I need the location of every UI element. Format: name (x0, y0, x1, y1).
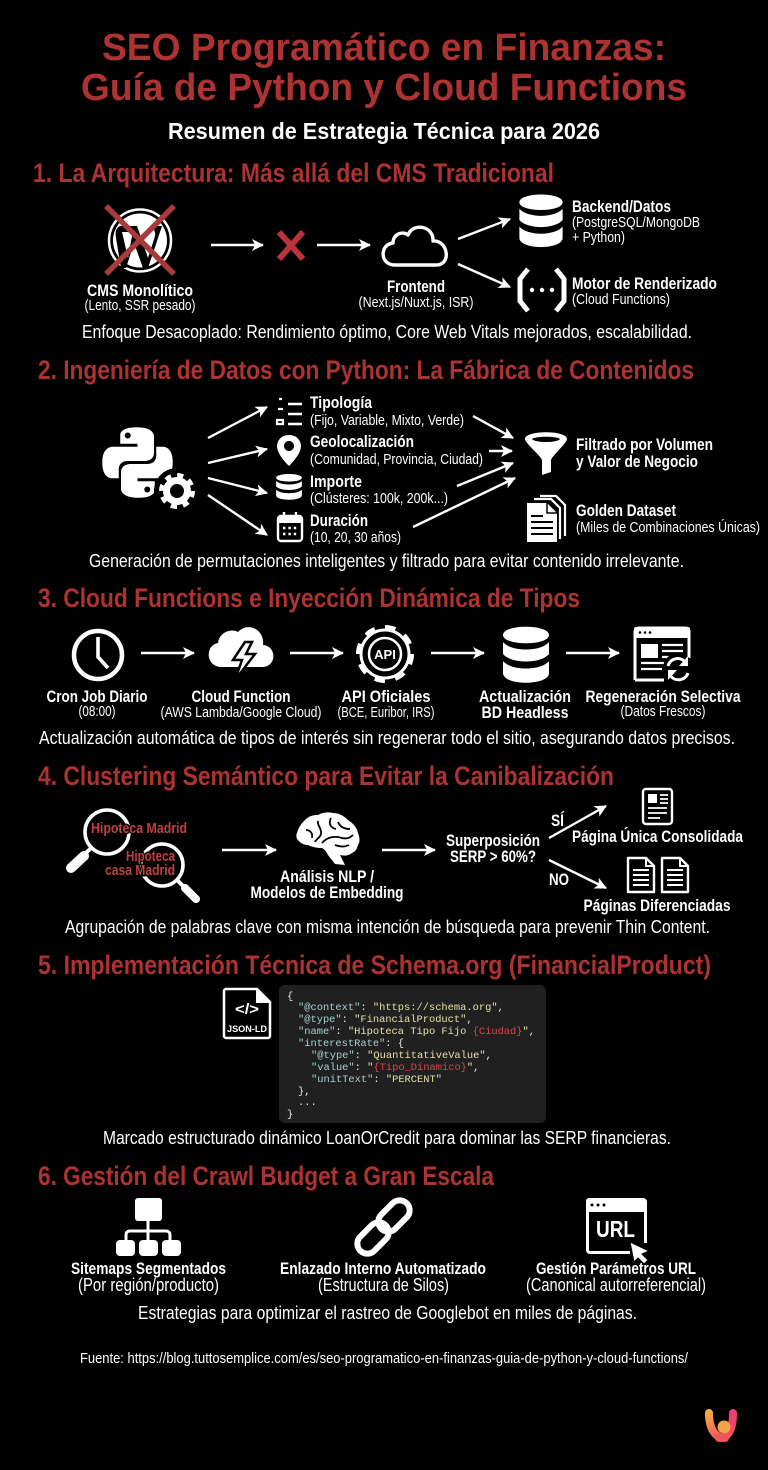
Importe label (310, 473, 448, 507)
arrows to funnel (413, 416, 515, 527)
panel: section 3 cloud functions (38, 583, 741, 748)
icon: typology list (277, 399, 302, 424)
Cron label: (08:00) (78, 703, 116, 720)
logo (709, 1413, 733, 1438)
Regeneración label: Regeneración Selectiva (586, 688, 741, 706)
arrow (431, 652, 484, 654)
icon: JSON-LD file: </> (235, 1001, 259, 1018)
Golden label (576, 502, 760, 536)
code panel: "@type": "FinancialProduct", (298, 1014, 473, 1026)
code panel: }, (298, 1086, 310, 1098)
Motor label (572, 275, 717, 308)
Importe label: (Clústeres: 100k, 200k...) (310, 490, 448, 507)
icon: URL browser (586, 1198, 649, 1264)
branch no: NO (549, 871, 569, 889)
Filtrado label: y Valor de Negocio (576, 453, 698, 471)
code panel: "@context": "https://schema.org", (298, 1002, 504, 1014)
heading 3: 3. Cloud Functions e Inyección Dinámica de Tipos (38, 583, 580, 613)
Frontend label: Frontend (387, 278, 445, 296)
Sitemaps label (71, 1260, 226, 1295)
branch yes: SÍ (551, 811, 564, 830)
arrows from python (208, 407, 267, 535)
question (446, 832, 540, 866)
Frontend label (358, 278, 474, 311)
icon: coins (276, 474, 302, 500)
code panel: "value": "{Tipo_Dinamico}", (311, 1062, 479, 1074)
Backend label (572, 198, 700, 246)
Importe label: Importe (310, 473, 362, 491)
icon: database (503, 627, 549, 683)
Cloud Function label: (AWS Lambda/Google Cloud) (160, 704, 322, 721)
Golden label: Golden Dataset (576, 502, 676, 520)
icon: magnifiers with keywords: Hipoteca Madrid (91, 820, 187, 837)
title (81, 27, 687, 109)
heading 1: 1. La Arquitectura: Más allá del CMS Tradicional (33, 158, 554, 188)
code panel: ... (298, 1097, 317, 1109)
Backend label: (PostgreSQL/MongoDB (572, 214, 700, 231)
NLP label: Modelos de Embedding (250, 884, 404, 902)
icon: python with gear (102, 427, 200, 514)
branch no (549, 860, 606, 889)
Tipología label: Tipología (310, 394, 373, 412)
panel: section 2 data engineering (38, 355, 760, 571)
icon: differentiated pages (628, 858, 688, 892)
icon: JSON-LD file (224, 989, 270, 1038)
Duración label: Duración (310, 512, 368, 530)
icon: red cross (279, 232, 303, 259)
icon: cloud (383, 227, 446, 265)
caption 2: Generación de permutaciones inteligentes y filtrado para evitar contenido irrelevante. (89, 550, 684, 571)
Duración label: (10, 20, 30 años) (310, 529, 401, 546)
Cron label: Cron Job Diario (46, 688, 148, 706)
Sitemaps label: Sitemaps Segmentados (71, 1260, 226, 1278)
panel: section 1 architecture (33, 158, 717, 342)
code panel (279, 985, 546, 1123)
Frontend label: (Next.js/Nuxt.js, ISR) (358, 294, 474, 311)
icon: calendar (278, 512, 302, 541)
Tipología label (310, 394, 464, 429)
Regeneración label: (Datos Frescos) (620, 703, 706, 720)
Gestión label: Gestión Parámetros URL (536, 1260, 696, 1278)
heading 6: 6. Gestión del Crawl Budget a Gran Escala (38, 1161, 495, 1191)
title: SEO Programático en Finanzas: (102, 27, 666, 69)
Motor label: (Cloud Functions) (572, 291, 670, 308)
question: SERP > 60%? (450, 848, 536, 866)
icon: location pin (277, 435, 301, 466)
Actualización label: Actualización (479, 688, 571, 706)
icon: API gear: API (374, 647, 396, 662)
Geolocalización label: Geolocalización (310, 433, 414, 451)
arrow (222, 849, 276, 851)
icon: URL browser: URL (596, 1216, 635, 1242)
icon: clock (74, 631, 122, 679)
icon: magnifiers with keywords (71, 810, 196, 899)
icon: documents stack (527, 496, 565, 542)
Enlazado label: Enlazado Interno Automatizado (280, 1260, 486, 1278)
NLP label: Análisis NLP / (280, 868, 374, 886)
Enlazado label: (Estructura de Silos) (318, 1275, 449, 1295)
Backend label: Backend/Datos (572, 198, 671, 216)
Gestión label: (Canonical autorreferencial) (526, 1275, 706, 1295)
arrow (290, 652, 343, 654)
Actualización label: BD Headless (482, 704, 568, 722)
code panel: "name": "Hipoteca Tipo Fijo {Ciudad}", (298, 1026, 535, 1038)
arrow (211, 244, 263, 246)
Backend label: + Python) (572, 229, 625, 246)
arrow (141, 652, 194, 654)
code panel: "@type": "QuantitativeValue", (311, 1050, 492, 1062)
API label: (BCE, Euribor, IRS) (338, 704, 434, 721)
arrow up (458, 219, 510, 239)
branch yes (549, 806, 606, 838)
panel: section 4 clustering (38, 761, 744, 937)
Cloud Function label: Cloud Function (192, 688, 290, 706)
Filtrado label: Filtrado por Volumen (576, 436, 713, 454)
CMS label: CMS Monolítico (87, 282, 193, 300)
code panel: } (287, 1109, 293, 1121)
label differentiated: Páginas Diferenciadas (584, 897, 730, 915)
icon: browser refresh (634, 627, 693, 683)
Sitemaps label: (Por región/producto) (78, 1275, 219, 1295)
CMS label: (Lento, SSR pesado) (84, 297, 196, 314)
icon: sitemap (116, 1198, 181, 1256)
caption 6: Estrategias para optimizar el rastreo de Googlebot en miles de páginas. (138, 1302, 637, 1323)
icon: API gear (359, 628, 411, 680)
Gestión label (526, 1260, 706, 1295)
icon: consolidated page (643, 789, 672, 824)
icon: magnifiers with keywords: casa Madrid (105, 862, 175, 879)
NLP label (250, 868, 404, 902)
question: Superposición (446, 832, 540, 850)
code panel: "interestRate": { (298, 1038, 404, 1050)
icon: crossed WordPress (106, 206, 174, 274)
arrow (317, 244, 370, 246)
Geolocalización label (310, 433, 483, 468)
arrow (566, 652, 619, 654)
source: Fuente: https://blog.tuttosemplice.com/es/seo-programatico-en-finanzas-guia-de-python-y-cloud-functions/ (80, 1350, 689, 1367)
subtitle: Resumen de Estrategia Técnica para 2026 (168, 118, 600, 144)
icon: cloud functions brackets (520, 269, 564, 311)
Actualización label (479, 688, 571, 722)
Geolocalización label: (Comunidad, Provincia, Ciudad) (310, 451, 483, 468)
icon: chain link (353, 1196, 414, 1258)
code panel: "unitText": "PERCENT" (311, 1074, 442, 1086)
icon: brain (296, 812, 360, 865)
panel: section 5 schema (38, 950, 711, 1148)
Cloud Function label (160, 688, 322, 721)
heading 4: 4. Clustering Semántico para Evitar la Canibalización (38, 761, 614, 791)
panel: section 6 crawl budget (38, 1161, 706, 1323)
CMS label (84, 282, 196, 314)
API label: API Oficiales (342, 688, 430, 706)
caption 5: Marcado estructurado dinámico LoanOrCredit para dominar las SERP financieras. (103, 1127, 671, 1148)
Cron label (46, 688, 148, 720)
Motor label: Motor de Renderizado (572, 275, 717, 293)
arrow down (458, 264, 510, 287)
Filtrado label (576, 436, 713, 471)
icon: database (519, 194, 563, 247)
icon: cloud bolt (209, 627, 273, 680)
Duración label (310, 512, 401, 546)
code panel: { (287, 991, 293, 1003)
title: Guía de Python y Cloud Functions (81, 67, 687, 109)
icon: magnifiers with keywords: Hipoteca (126, 848, 175, 865)
API label (338, 688, 434, 721)
Enlazado label (280, 1260, 486, 1295)
icon: JSON-LD file: JSON-LD (227, 1024, 267, 1034)
Regeneración label (586, 688, 741, 720)
icon: funnel (525, 432, 567, 475)
Tipología label: (Fijo, Variable, Mixto, Verde) (310, 412, 464, 429)
arrow (382, 849, 435, 851)
